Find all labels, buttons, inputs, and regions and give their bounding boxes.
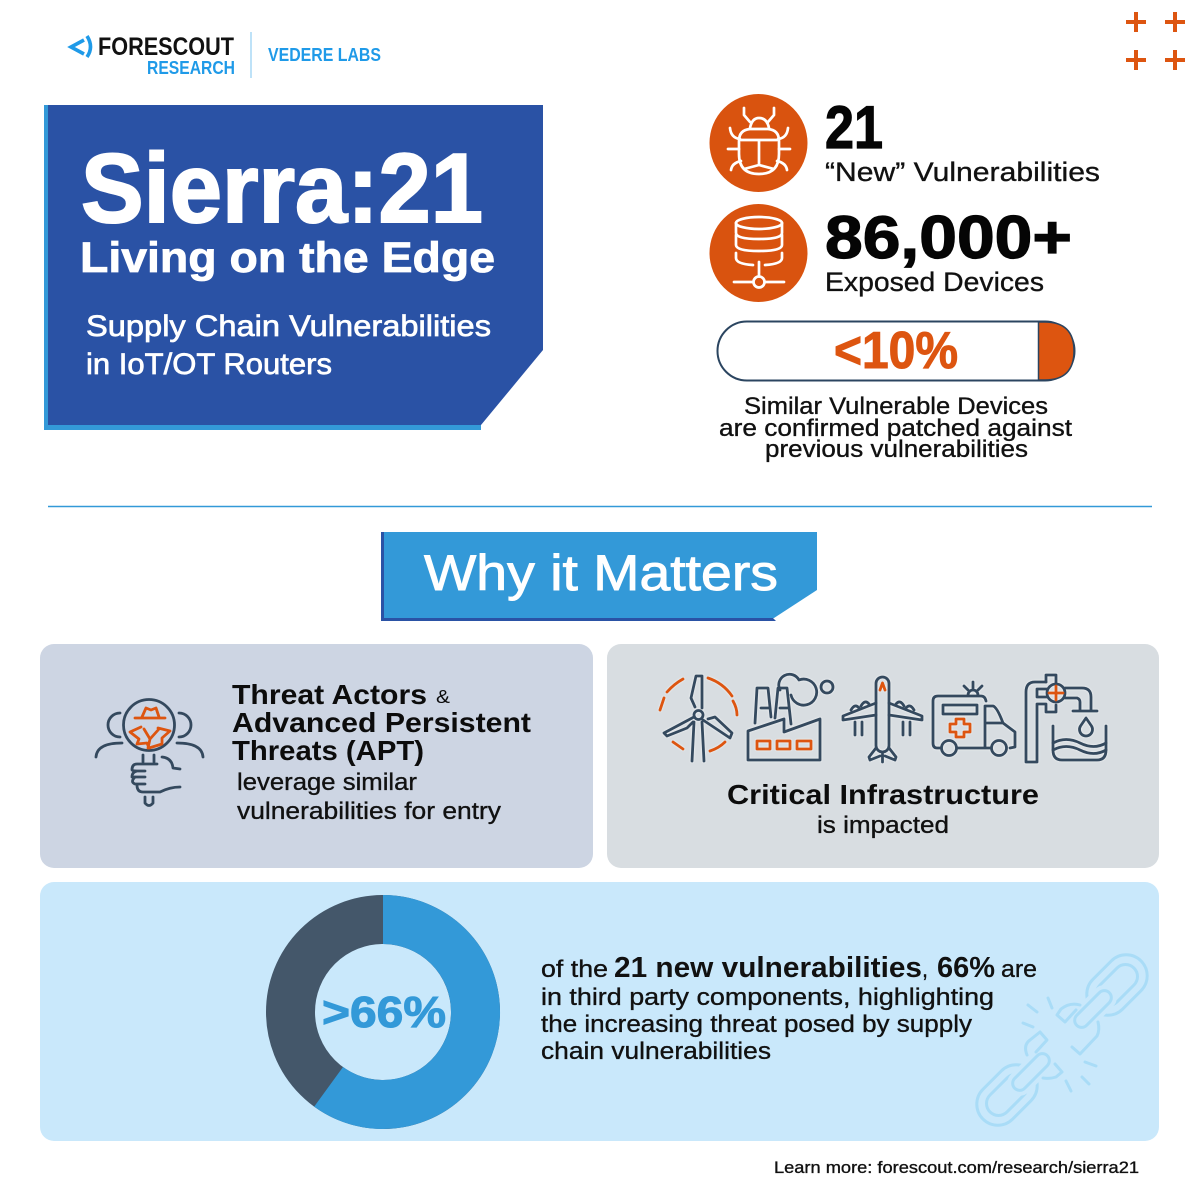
text: threat actors heading: Threats (APT)	[232, 735, 424, 766]
heading banner: Why it Matters	[381, 532, 817, 621]
title: Sierra:21	[81, 133, 483, 243]
text block: patch explanation: are confirmed patched against	[719, 415, 1072, 442]
text block: third party description: of the	[541, 956, 608, 983]
text block: patch explanation: previous vulnerabilities	[765, 436, 1028, 463]
panel: critical infrastructure	[607, 644, 1159, 868]
icon: broken chain	[968, 946, 1156, 1134]
panel: third party components	[40, 882, 1159, 1141]
stat value: <10%	[834, 322, 958, 380]
icon: water pipe and tank	[1026, 675, 1106, 762]
icon: magnifier with spy	[96, 700, 203, 806]
text: threat actors heading: Threat Actors	[232, 679, 427, 710]
panel: threat actors	[40, 644, 593, 868]
text block: third party description: the increasing threat posed by supply	[541, 1011, 972, 1038]
logo wordmark: Research: RESEARCH	[147, 58, 235, 78]
text block: patch explanation	[719, 393, 1072, 463]
icon: airplane	[843, 677, 922, 762]
stat: 86,000+ exposed devices	[825, 204, 1072, 297]
stat: 86,000+ exposed devices: 86,000+	[825, 204, 1072, 271]
text block: third party description: are	[1001, 956, 1037, 983]
icon: ambulance	[933, 682, 1015, 756]
donut chart: 66%	[290, 920, 476, 1104]
description: Supply Chain Vulnerabilities	[86, 310, 491, 343]
text: threat actors description: vulnerabilities for entry	[237, 798, 501, 825]
text: threat actors heading	[232, 679, 531, 766]
text block: third party description: chain vulnerabilities	[541, 1038, 771, 1065]
text block: third party description	[541, 952, 1037, 1065]
logo: Forescout Research Vedere Labs	[71, 32, 381, 78]
stat: 21 new vulnerabilities: “New” Vulnerabilities	[825, 157, 1100, 187]
text: threat actors heading: Advanced Persistent	[232, 707, 531, 738]
footer: learn more link: Learn more: forescout.com/research/sierra21	[774, 1158, 1139, 1177]
description: in IoT/OT Routers	[86, 348, 332, 381]
subtitle: Living on the Edge	[80, 234, 495, 282]
icon: Forescout chevrons	[71, 36, 90, 57]
text: threat actors heading: &	[436, 687, 450, 707]
stat value: >66%	[322, 988, 446, 1037]
icon: factory	[748, 674, 833, 760]
logo wordmark: Forescout: FORESCOUT	[98, 33, 234, 61]
text: critical infrastructure heading: Critical Infrastructure	[727, 779, 1039, 810]
text block: third party description: 21 new vulnerabilities	[614, 952, 922, 984]
text block: third party description: in third party components, highlighting	[541, 984, 994, 1011]
text: threat actors description	[237, 769, 501, 825]
icon: bug	[710, 94, 808, 192]
panel: title banner	[44, 105, 543, 430]
icon: database network	[710, 204, 808, 302]
text: is impacted: is impacted	[817, 812, 949, 839]
progress pill: under 10% patched	[718, 322, 1074, 380]
heading banner: Why it Matters: Why it Matters	[424, 545, 778, 601]
stat: 21 new vulnerabilities	[825, 94, 1100, 187]
text block: third party description: ,	[922, 956, 928, 983]
description	[86, 310, 491, 381]
text: threat actors description: leverage similar	[237, 769, 417, 796]
text block: patch explanation: Similar Vulnerable Devices	[744, 393, 1048, 420]
logo wordmark: Vedere Labs: VEDERE LABS	[268, 45, 381, 65]
icon: wind turbine	[660, 676, 737, 761]
stat: 86,000+ exposed devices: Exposed Devices	[825, 267, 1044, 297]
stat: 21 new vulnerabilities: 21	[825, 94, 883, 161]
text block: third party description: 66%	[937, 952, 995, 984]
icon: decorative plus signs	[1126, 12, 1185, 70]
